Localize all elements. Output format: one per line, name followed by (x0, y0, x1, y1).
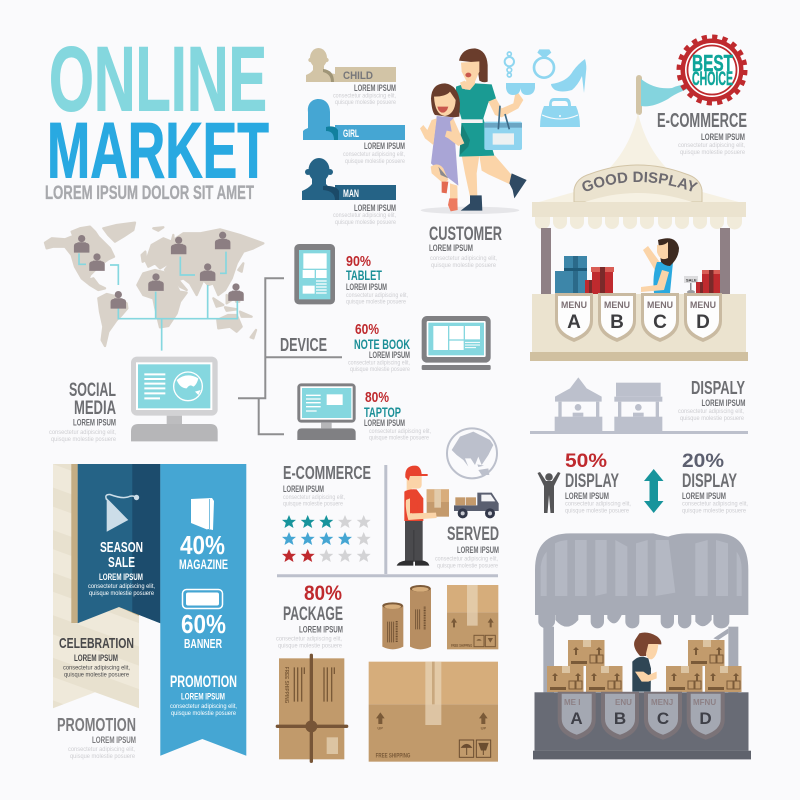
text block: served (435, 524, 499, 570)
panel: child profile (306, 48, 397, 106)
text block: social media: LOREM IPSUM (73, 418, 116, 428)
arrow: up and down (644, 469, 664, 513)
menu shields: MENU (604, 300, 630, 310)
menu shields (555, 293, 722, 342)
text block: e-commerce top: LOREM IPSUM (701, 132, 745, 142)
flag (636, 75, 702, 115)
panel: child profile: quisque molestie posuere (335, 100, 397, 106)
panel: girl profile (303, 99, 406, 165)
text block: customer: CUSTOMER (429, 224, 502, 245)
menu shields: D (696, 312, 710, 333)
text block: dispaly (678, 378, 746, 422)
panel: beige celebration ribbon: CELEBRATION (59, 635, 134, 652)
text block: note book: consectetur adipiscing elit, (348, 360, 410, 366)
illustration: tied parcel (277, 655, 347, 761)
text block: social media: SOCIAL (69, 380, 116, 401)
text block: 50% display: quisque molestie posuere (565, 508, 630, 514)
text block: social media: MEDIA (74, 398, 116, 419)
panel: beige celebration ribbon (53, 464, 139, 708)
panel: dark blue season sale ribbon: SALE (108, 554, 135, 571)
icon: watch (505, 52, 514, 77)
text block: tablet: TABLET (346, 267, 382, 283)
text block: e-commerce top (657, 110, 747, 156)
text block: promotion: quisque molestie posuere (70, 754, 136, 760)
icon: banner (182, 590, 222, 608)
title: MARKET (47, 106, 269, 194)
text block: 20% display: 20% (682, 451, 724, 472)
text block: dispaly: DISPALY (691, 378, 745, 398)
menu shields: C (653, 312, 667, 333)
badge: best choice: CHOICE (692, 69, 733, 90)
grey menu shields: MFNU (693, 698, 716, 707)
text block: e-commerce ratings: consectetur adipiscing elit, (283, 495, 345, 501)
sale sign (684, 276, 698, 294)
panel: light blue magazine and banner ribbon: BANNER (184, 636, 222, 651)
text block: dispaly: consectetur adipiscing elit, (678, 409, 744, 415)
badge: best choice (679, 37, 745, 103)
text block: 50% display: consectetur adipiscing elit, (565, 502, 631, 508)
panel: beige celebration ribbon: quisque molestie posuere (64, 672, 130, 678)
panel: dark blue season sale ribbon: SEASON (100, 539, 143, 556)
text block: customer: consectetur adipiscing elit, (430, 256, 497, 262)
icon: globe (447, 428, 497, 478)
text block: customer (429, 224, 502, 269)
text block: note book: 60% (355, 321, 379, 338)
icon: ring (534, 49, 554, 78)
text block: taptop: consectetur adipiscing elit, (369, 429, 431, 435)
text block: taptop: LOREM IPSUM (364, 418, 405, 428)
grey menu shields: MENJ (651, 698, 673, 707)
text block: note book: NOTE BOOK (354, 336, 410, 352)
icon: delivery truck (454, 493, 499, 518)
text block: 50% display: LOREM IPSUM (565, 491, 609, 501)
panel: child profile: LOREM IPSUM (354, 83, 396, 93)
icon: handbag (540, 98, 580, 127)
text block: served: quisque molestie posuere (437, 564, 499, 570)
panel: man profile: quisque molestie posuere (335, 220, 397, 226)
panel: light blue magazine and banner ribbon: consectetur adipiscing elit, (170, 704, 237, 710)
dividers (277, 465, 498, 576)
text block: promotion: LOREM IPSUM (92, 735, 136, 745)
panel: girl profile: quisque molestie posuere (345, 159, 406, 165)
text block: served: SERVED (447, 524, 499, 545)
panel: girl profile: LOREM IPSUM (364, 141, 405, 151)
text block: promotion: PROMOTION (57, 715, 136, 735)
menu shields: A (567, 312, 581, 333)
text block: e-commerce ratings: E-COMMERCE (283, 463, 371, 483)
text block: taptop: TAPTOP (364, 404, 401, 420)
text block: 20% display: DISPLAY (682, 471, 737, 492)
gift boxes left (555, 256, 614, 294)
icon: tablet (294, 244, 335, 304)
text block: package: LOREM IPSUM (299, 624, 343, 634)
text block: note book (348, 321, 411, 373)
panel: child profile: CHILD (343, 70, 373, 82)
icon: play flag (106, 494, 139, 532)
text block: e-commerce top: quisque molestie posuere (680, 150, 746, 156)
text block: note book: quisque molestie posuere (350, 367, 411, 373)
text block: taptop (364, 389, 431, 442)
text block: taptop: 80% (365, 389, 389, 406)
menu shields: MENU (561, 300, 587, 310)
icon: desktop computer (297, 383, 356, 440)
grey menu shields: C (657, 709, 669, 728)
text block: 20% display: consectetur adipiscing elit, (682, 502, 748, 508)
panel: man profile: MAN (343, 188, 359, 200)
panel: dark blue season sale ribbon: LOREM IPSUM (99, 572, 143, 582)
text block: 20% display: LOREM IPSUM (682, 491, 726, 501)
text block: tablet: LOREM IPSUM (346, 282, 387, 292)
illustration: tied parcel: FREE SHIPPING (283, 667, 289, 703)
panel: beige celebration ribbon: consectetur adipiscing elit, (63, 666, 130, 672)
text block: served: consectetur adipiscing elit, (435, 556, 498, 562)
text block: e-commerce ratings (283, 463, 371, 508)
panel: dark blue season sale ribbon: consectetur adipiscing elit, (88, 584, 155, 590)
text block: tablet: consectetur adipiscing elit, (346, 293, 408, 299)
text block: package: PACKAGE (283, 604, 343, 625)
text block: e-commerce ratings: LOREM IPSUM (283, 484, 324, 494)
gift boxes right (696, 270, 720, 294)
seller woman (641, 238, 679, 293)
illustration: grey market stall (535, 533, 748, 693)
text block: social media: consectetur adipiscing elit, (49, 430, 116, 436)
panel: girl profile: GIRL (343, 128, 359, 140)
text block: social media: quisque molestie posuere (51, 437, 117, 443)
text block: e-commerce top: E-COMMERCE (657, 110, 747, 132)
illustration: good display market stall (530, 114, 748, 361)
text block: 20% display (682, 451, 748, 514)
icon: cheering person (538, 472, 560, 513)
grey menu shields: ENU (615, 698, 632, 707)
illustration: large cardboard box: UP (481, 725, 487, 730)
text block: tablet: 90% (346, 253, 371, 270)
text block: e-commerce ratings: quisque molestie posuere (283, 502, 344, 508)
panel: light blue magazine and banner ribbon: 40% (180, 530, 225, 560)
text block: tablet (346, 253, 408, 306)
panel: child profile: consectetur adipiscing elit, (333, 94, 396, 100)
cardboard boxes on grey stall (547, 640, 742, 692)
sign: good display: GOOD DISPLAY (582, 172, 698, 192)
text block: e-commerce top: consectetur adipiscing elit, (678, 143, 745, 149)
text block: 50% display (565, 451, 631, 514)
title: LOREM IPSUM DOLOR SIT AMET (45, 183, 254, 204)
panel: light blue magazine and banner ribbon (160, 464, 246, 756)
panel: girl profile: consectetur adipiscing elit, (343, 152, 405, 158)
text block: package: consectetur adipiscing elit, (276, 636, 342, 642)
icon: grey stalls (530, 377, 748, 434)
illustration: large cardboard box: UP (377, 725, 383, 730)
panel: man profile: LOREM IPSUM (354, 203, 396, 213)
text block: dispaly: quisque molestie posuere (680, 416, 745, 422)
panel: man profile: consectetur adipiscing elit, (333, 213, 396, 219)
icon: magazine (191, 498, 214, 530)
grey menu shields: B (614, 709, 626, 728)
device tree connector (238, 278, 342, 434)
grey menu shields (558, 692, 725, 740)
text block: social media (49, 380, 117, 443)
menu shields: B (610, 312, 624, 333)
world map (45, 223, 263, 351)
text block: 50% display: DISPLAY (565, 471, 619, 492)
icon: sunglasses (506, 83, 535, 95)
illustration: woman and girl shopping (420, 48, 527, 214)
grey stall seller (632, 633, 661, 692)
panel: light blue magazine and banner ribbon: LOREM IPSUM (181, 692, 225, 702)
title (45, 28, 269, 204)
grey stall counter (533, 692, 751, 759)
panel: light blue magazine and banner ribbon: MAGAZINE (179, 556, 228, 572)
panel: man profile (302, 158, 397, 226)
illustration: large cardboard box: FREE SHIPPING (376, 753, 411, 759)
badge: best choice: BEST (692, 50, 733, 76)
illustration: small cardboard box: FREE SHIPPING (451, 643, 473, 648)
menu shields: MENU (690, 300, 716, 310)
text block: taptop: quisque molestie posuere (369, 436, 430, 442)
grey menu shields: ME I (564, 698, 580, 707)
text block: dispaly: LOREM IPSUM (702, 398, 746, 408)
illustration: small cardboard box (447, 585, 498, 649)
panel: dark blue season sale ribbon: quisque molestie posuere (89, 591, 155, 597)
text block: 50% display: 50% (565, 451, 607, 472)
text block: served: LOREM IPSUM (457, 545, 499, 555)
panel: light blue magazine and banner ribbon: 60% (181, 609, 226, 639)
panel: beige celebration ribbon: LOREM IPSUM (74, 653, 118, 663)
sale sign: SALE (686, 278, 697, 282)
text block: package (276, 582, 343, 650)
panel: light blue magazine and banner ribbon: PROMOTION (170, 672, 237, 691)
panel: dark blue season sale ribbon (78, 464, 160, 623)
text block: customer: LOREM IPSUM (429, 243, 473, 253)
icon: high-heel shoe (551, 59, 586, 93)
sign: good display (574, 164, 702, 202)
text block: note book: LOREM IPSUM (369, 350, 410, 360)
grey menu shields: A (570, 709, 583, 728)
illustration: delivery man (397, 466, 449, 566)
icon: notebook (422, 316, 491, 370)
panel: light blue magazine and banner ribbon: quisque molestie posuere (171, 711, 237, 717)
text block: package: quisque molestie posuere (278, 644, 343, 650)
text block: promotion (57, 715, 136, 760)
heading: device: DEVICE (280, 335, 327, 355)
text block: 20% display: quisque molestie posuere (682, 508, 747, 514)
icon: social media monitor (131, 357, 218, 441)
star ratings (282, 515, 371, 562)
text block: tablet: quisque molestie posuere (346, 300, 407, 306)
illustration: large cardboard box (369, 662, 498, 762)
title: ONLINE (49, 28, 267, 130)
grey menu shields: D (699, 709, 712, 728)
text block: customer: quisque molestie posuere (431, 263, 497, 269)
text block: promotion: consectetur adipiscing elit, (68, 747, 135, 753)
menu shields: MENU (647, 300, 673, 310)
text block: package: 80% (304, 582, 342, 605)
illustration: shipping tubes (382, 585, 431, 649)
